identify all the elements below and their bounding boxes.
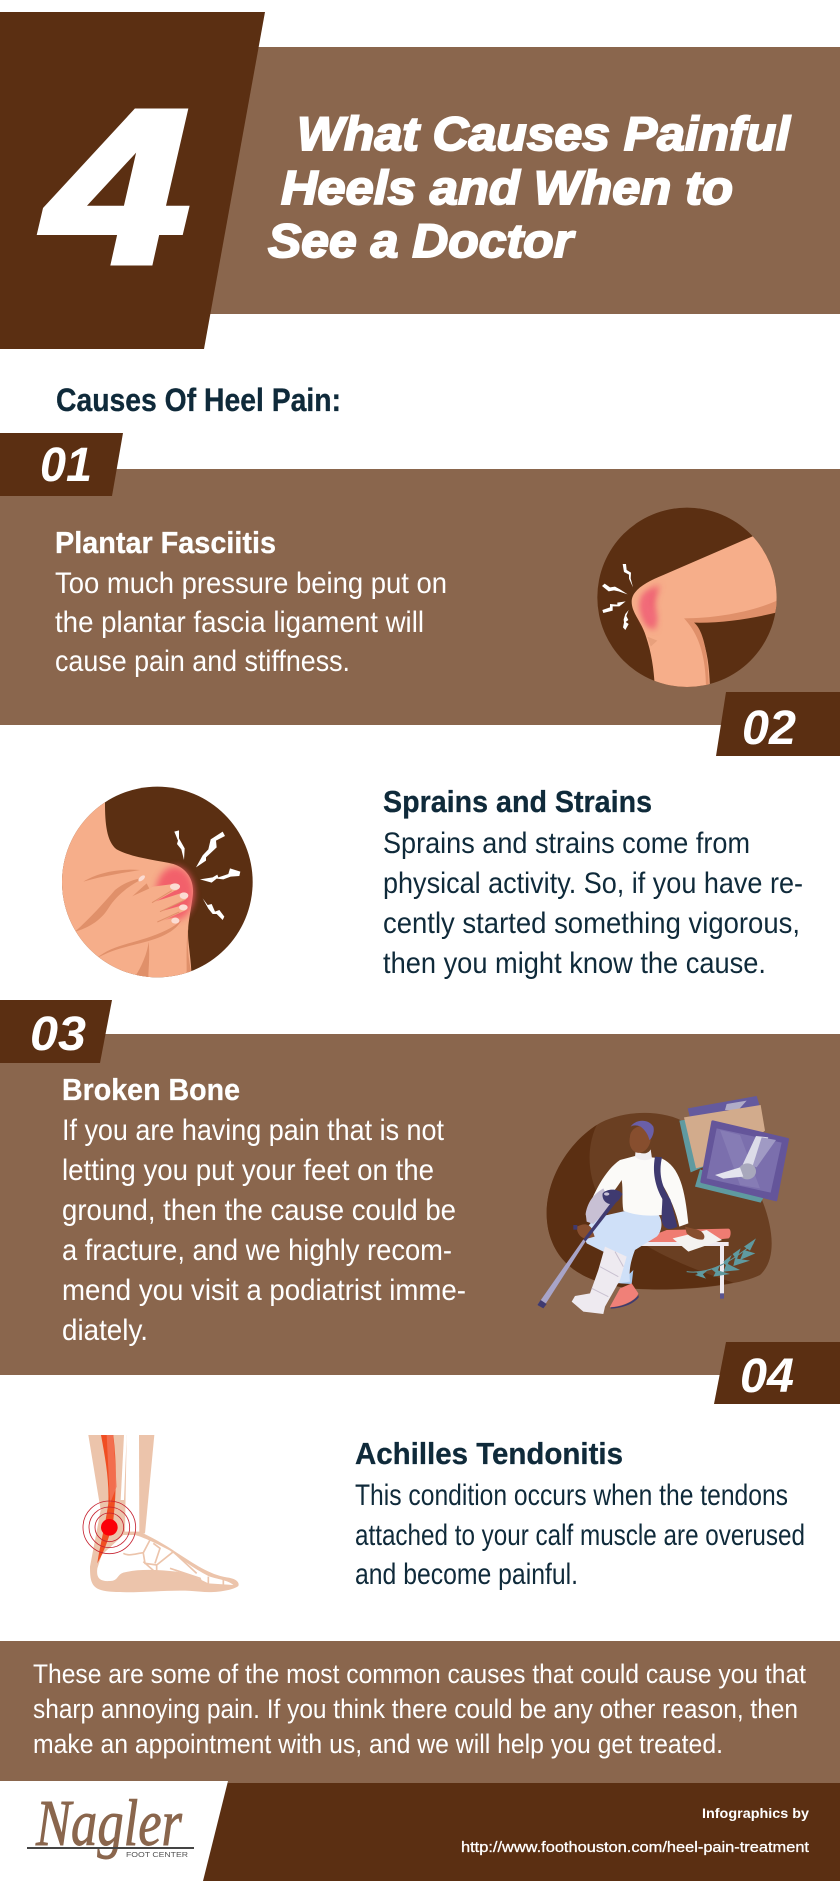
heading: achilles tendonitis: Achilles Tendonitis bbox=[355, 1436, 623, 1471]
title bbox=[268, 107, 791, 267]
text: achilles tendonitis: and become painful. bbox=[355, 1558, 578, 1591]
title: Heels and When to bbox=[281, 161, 733, 214]
panel: closing text bbox=[0, 1641, 840, 1783]
text: sprains and strains: then you might know the cause. bbox=[383, 947, 766, 980]
text: sprains and strains: cently started something vigorous, bbox=[383, 907, 800, 940]
icon: achilles foot bbox=[83, 1435, 239, 1592]
section heading: Causes Of Heel Pain: bbox=[56, 382, 341, 418]
badge 03: 03 bbox=[30, 1008, 86, 1061]
text: broken bone: letting you put your feet on the bbox=[62, 1154, 434, 1187]
badge 04 bbox=[714, 1342, 840, 1404]
icon: painful knee bbox=[597, 508, 793, 690]
blob bbox=[547, 1113, 772, 1290]
panel: closing text: make an appointment with us, and we will help you get treated. bbox=[33, 1729, 723, 1759]
logo: Nagler Foot Center: Nagler bbox=[35, 1787, 182, 1860]
title: See a Doctor bbox=[268, 214, 576, 267]
text: sprains and strains: Sprains and strains come from bbox=[383, 827, 750, 860]
bench bbox=[637, 1229, 731, 1299]
illustration: man with crutch and x-rays bbox=[537, 1096, 788, 1314]
text: broken bone: ground, then the cause could be bbox=[62, 1194, 456, 1227]
text: plantar fasciitis: the plantar fascia ligament will bbox=[55, 606, 424, 639]
panel: plantar fasciitis bbox=[0, 433, 840, 725]
badge 02: 02 bbox=[742, 702, 796, 755]
badge 01: 01 bbox=[40, 439, 92, 492]
panel: broken bone bbox=[0, 1000, 840, 1375]
text: plantar fasciitis bbox=[55, 567, 447, 678]
text: broken bone: If you are having pain that is not bbox=[62, 1114, 445, 1147]
credit text bbox=[461, 1805, 810, 1856]
text: achilles tendonitis bbox=[355, 1479, 805, 1591]
header banner bbox=[0, 12, 840, 349]
logo: Nagler Foot Center bbox=[0, 1781, 228, 1881]
text: broken bone: diately. bbox=[62, 1314, 148, 1347]
title: What Causes Painful bbox=[297, 107, 791, 160]
heading: plantar fasciitis: Plantar Fasciitis bbox=[55, 525, 276, 560]
badge 04: 04 bbox=[740, 1350, 794, 1403]
credit text: http://www.foothouston.com/heel-pain-treatment bbox=[461, 1839, 810, 1856]
credit text: Infographics by bbox=[702, 1805, 809, 1821]
text: broken bone: a fracture, and we highly recom- bbox=[62, 1234, 452, 1267]
badge 03 bbox=[0, 1000, 112, 1063]
badge 02 bbox=[716, 692, 840, 756]
text: sprains and strains: physical activity. So, if you have re- bbox=[383, 867, 803, 900]
heading: broken bone: Broken Bone bbox=[62, 1072, 240, 1107]
heading: sprains and strains: Sprains and Strains bbox=[383, 784, 652, 819]
logo: Nagler Foot Center: FOOT CENTER bbox=[126, 1852, 188, 1859]
text: plantar fasciitis: cause pain and stiffness. bbox=[55, 645, 350, 678]
big number 4: 4 bbox=[41, 66, 189, 309]
text: broken bone: mend you visit a podiatrist imme- bbox=[62, 1274, 466, 1307]
text: broken bone bbox=[62, 1114, 466, 1347]
text: sprains and strains bbox=[383, 827, 803, 980]
footer bbox=[0, 1781, 840, 1881]
man bbox=[537, 1121, 704, 1314]
plant bbox=[687, 1238, 756, 1279]
icon: hand on knee bbox=[62, 786, 253, 978]
badge 01 bbox=[0, 433, 123, 496]
text: plantar fasciitis: Too much pressure being put on bbox=[55, 567, 447, 600]
x-ray films bbox=[679, 1096, 788, 1203]
